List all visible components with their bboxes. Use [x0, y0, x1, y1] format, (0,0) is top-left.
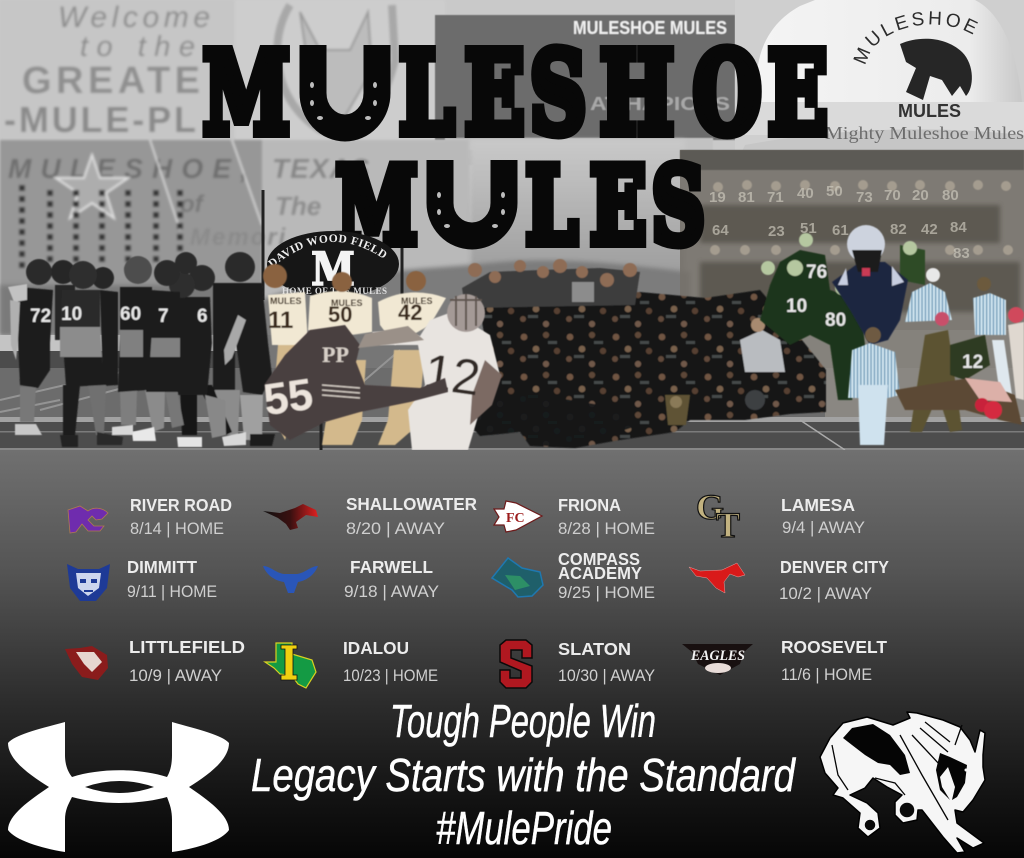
- game: Dimmitt: DIMMITT: [127, 557, 197, 577]
- game: Lamesa: G: [696, 487, 724, 527]
- left huddle players: 10: [61, 304, 82, 325]
- backdrop: welcome sign: Welcome: [58, 1, 210, 34]
- backdrop: vintage team photo: 23: [768, 223, 785, 240]
- backdrop: welcome sign: [0, 0, 235, 140]
- backdrop: vintage team photo: 70: [884, 187, 901, 204]
- navy helmet player: [832, 225, 908, 345]
- tower lettering: [825, 11, 1024, 143]
- player 55 dark jersey: [261, 325, 448, 440]
- backdrop: vintage team photo: 20: [912, 187, 929, 204]
- game: Lamesa: [696, 487, 865, 545]
- player 60: [112, 256, 152, 435]
- tower lettering: MULES: [898, 101, 961, 121]
- game: River Road: [68, 495, 232, 538]
- game: Roosevelt: ROOSEVELT: [781, 637, 887, 657]
- game: Shallowater: SHALLOWATER: [346, 494, 477, 514]
- backdrop: vintage team photo: 71: [767, 189, 784, 206]
- game: Denver City: [689, 557, 889, 603]
- emblem: David Wood Field: DAVID WOOD FIELD: [268, 234, 386, 266]
- game: Roosevelt: [682, 637, 887, 684]
- game: Friona: [494, 495, 655, 538]
- game: Dimmitt: [67, 557, 217, 601]
- logo: Under Armour: [8, 722, 229, 852]
- crowd of students: [462, 259, 826, 448]
- backdrop: left field and cheer panel: of: [180, 191, 205, 218]
- game: Roosevelt: 11/6 | HOME: [781, 666, 872, 684]
- logo: mule mascot: [820, 712, 985, 853]
- tower lettering: Mighty Muleshoe Mules: [825, 123, 1024, 143]
- backdrop: vintage team photo: 40: [797, 185, 814, 202]
- game: Lamesa: 9/4 | AWAY: [782, 519, 865, 537]
- green team players: 76: [806, 262, 827, 283]
- green team players: 80: [825, 310, 846, 331]
- cream uniform players: MULES: [331, 298, 362, 308]
- game: Denver City: 10/2 | AWAY: [779, 585, 872, 603]
- game: Friona: FC: [506, 511, 525, 526]
- game: Slaton: [500, 639, 655, 688]
- cream uniform players: 11: [268, 307, 293, 334]
- game: River Road: 8/14 | HOME: [130, 520, 224, 538]
- backdrop: left field and cheer panel: MULESHOE,: [8, 153, 248, 184]
- foreground: players: [8, 224, 1024, 450]
- game: Idalou: [265, 638, 438, 688]
- goal posts: [263, 190, 402, 450]
- backdrop: left field and cheer panel: TEXAS: [272, 153, 370, 184]
- green team players: 10: [786, 296, 807, 317]
- schedule band: [0, 450, 1024, 858]
- player 12 in white: [372, 294, 502, 450]
- backdrop: vintage team photo: 82: [890, 221, 907, 238]
- backdrop: mule horseshoe emblem: [235, 0, 445, 140]
- game: Compass Academy: COMPASS: [558, 549, 640, 569]
- tagline: Tough People Win: [390, 695, 656, 747]
- olive players falling: [895, 307, 1024, 432]
- backdrop: billboard: AT HAPIONS: [590, 94, 730, 114]
- emblem: David Wood Field: M: [311, 242, 355, 296]
- schedule: [65, 487, 889, 688]
- horseshoe letter: [437, 160, 505, 236]
- player 10: [60, 261, 123, 447]
- game: Denver City: DENVER CITY: [780, 557, 889, 577]
- game: Shallowater: [263, 494, 477, 538]
- backdrop: welcome sign: -MULE-PL: [4, 99, 196, 140]
- player 12 in white: 12: [421, 343, 484, 406]
- player 6: [166, 252, 232, 447]
- backdrop: vintage team photo: 50: [826, 183, 843, 200]
- referees: [848, 268, 1012, 445]
- backdrop: welcome sign: GREATE: [22, 60, 200, 102]
- title line 1: MULESHOE: [203, 27, 828, 159]
- cream uniform players: MULES: [401, 296, 432, 306]
- game: Idalou: 10/23 | HOME: [343, 667, 438, 685]
- olive players falling: 12: [962, 352, 983, 373]
- tower lettering: MULESHOE: [853, 11, 978, 64]
- game: Farwell: 9/18 | AWAY: [344, 583, 439, 601]
- left huddle players: 7: [158, 306, 169, 327]
- backdrop: vintage team photo: 84: [950, 219, 967, 236]
- backdrop: vintage team photo: [680, 150, 1024, 330]
- backdrop: vintage team photo: 80: [942, 187, 959, 204]
- player 72: [8, 259, 53, 435]
- backdrop: billboard: [435, 15, 735, 195]
- game: Littlefield: [65, 637, 245, 685]
- game: Compass Academy: 9/25 | HOME: [558, 584, 655, 602]
- title: [203, 27, 828, 268]
- kids row: [462, 259, 640, 308]
- horseshoe letter: [310, 45, 377, 128]
- backdrop: left field and cheer panel: [0, 140, 470, 335]
- backdrop: welcome sign: to the: [80, 31, 195, 63]
- player behind: [51, 260, 118, 386]
- game: Littlefield: 10/9 | AWAY: [129, 667, 222, 685]
- backdrop: vintage team photo: 83: [953, 245, 970, 262]
- left huddle players: 60: [120, 304, 141, 325]
- game: Slaton: SLATON: [558, 639, 631, 659]
- left huddle players: 6: [197, 306, 208, 327]
- game: Lamesa: LAMESA: [781, 495, 855, 515]
- emblem: David Wood Field: HOME OF THE MULES: [282, 286, 387, 296]
- game: Lamesa: T: [716, 505, 740, 545]
- backdrop: vintage team photo: 64: [712, 222, 729, 239]
- game: Slaton: 10/30 | AWAY: [558, 667, 655, 685]
- game: Shallowater: 8/20 | AWAY: [346, 520, 445, 538]
- left huddle players: 72: [30, 306, 51, 327]
- green team players: [760, 233, 925, 400]
- emblem: David Wood Field: [267, 231, 399, 296]
- tagline: Legacy Starts with the Standard: [251, 749, 796, 801]
- title line 2: MULES: [336, 145, 705, 268]
- backdrop: vintage team photo: 19: [709, 189, 726, 206]
- game: Roosevelt: EAGLES: [690, 648, 745, 664]
- cream uniform players: [263, 264, 446, 445]
- backdrop: vintage team photo: 81: [738, 189, 755, 206]
- backdrop: billboard: MULESHOE MULES: [573, 18, 727, 38]
- backdrop: vintage team photo: 51: [800, 220, 817, 237]
- backdrop: center hills: [0, 140, 690, 340]
- game: Farwell: [263, 557, 439, 601]
- player 55 dark jersey: 55: [261, 370, 316, 425]
- left huddle players: [8, 252, 275, 447]
- field: [0, 330, 1024, 450]
- cream uniform players: 42: [398, 300, 422, 325]
- player 7: [132, 260, 184, 441]
- backdrop: left field and cheer panel: Memori: [190, 224, 287, 251]
- game: Dimmitt: 9/11 | HOME: [127, 583, 217, 601]
- cream uniform players: MULES: [270, 296, 302, 306]
- game: Farwell: FARWELL: [350, 557, 433, 577]
- tagline: [251, 695, 796, 854]
- background: photo collage: [0, 0, 1024, 450]
- game: River Road: RIVER ROAD: [130, 495, 232, 515]
- backdrop: vintage team photo: 42: [921, 221, 938, 238]
- game: Friona: 8/28 | HOME: [558, 520, 655, 538]
- backdrop: vintage team photo: 73: [856, 189, 873, 206]
- game: Compass Academy: [492, 549, 655, 602]
- tagline: #MulePride: [436, 802, 612, 854]
- game: Littlefield: LITTLEFIELD: [129, 637, 245, 657]
- game: Idalou: IDALOU: [343, 638, 409, 658]
- backdrop: left field and cheer panel: The: [275, 191, 321, 221]
- player far right: [213, 252, 275, 446]
- game: Friona: FRIONA: [558, 495, 621, 515]
- player 55 dark jersey: PP: [322, 342, 349, 367]
- cream uniform players: 50: [328, 302, 352, 327]
- game: Compass Academy: ACADEMY: [558, 563, 642, 583]
- backdrop: vintage team photo: 61: [832, 222, 849, 239]
- backdrop: water tower: [735, 0, 1024, 143]
